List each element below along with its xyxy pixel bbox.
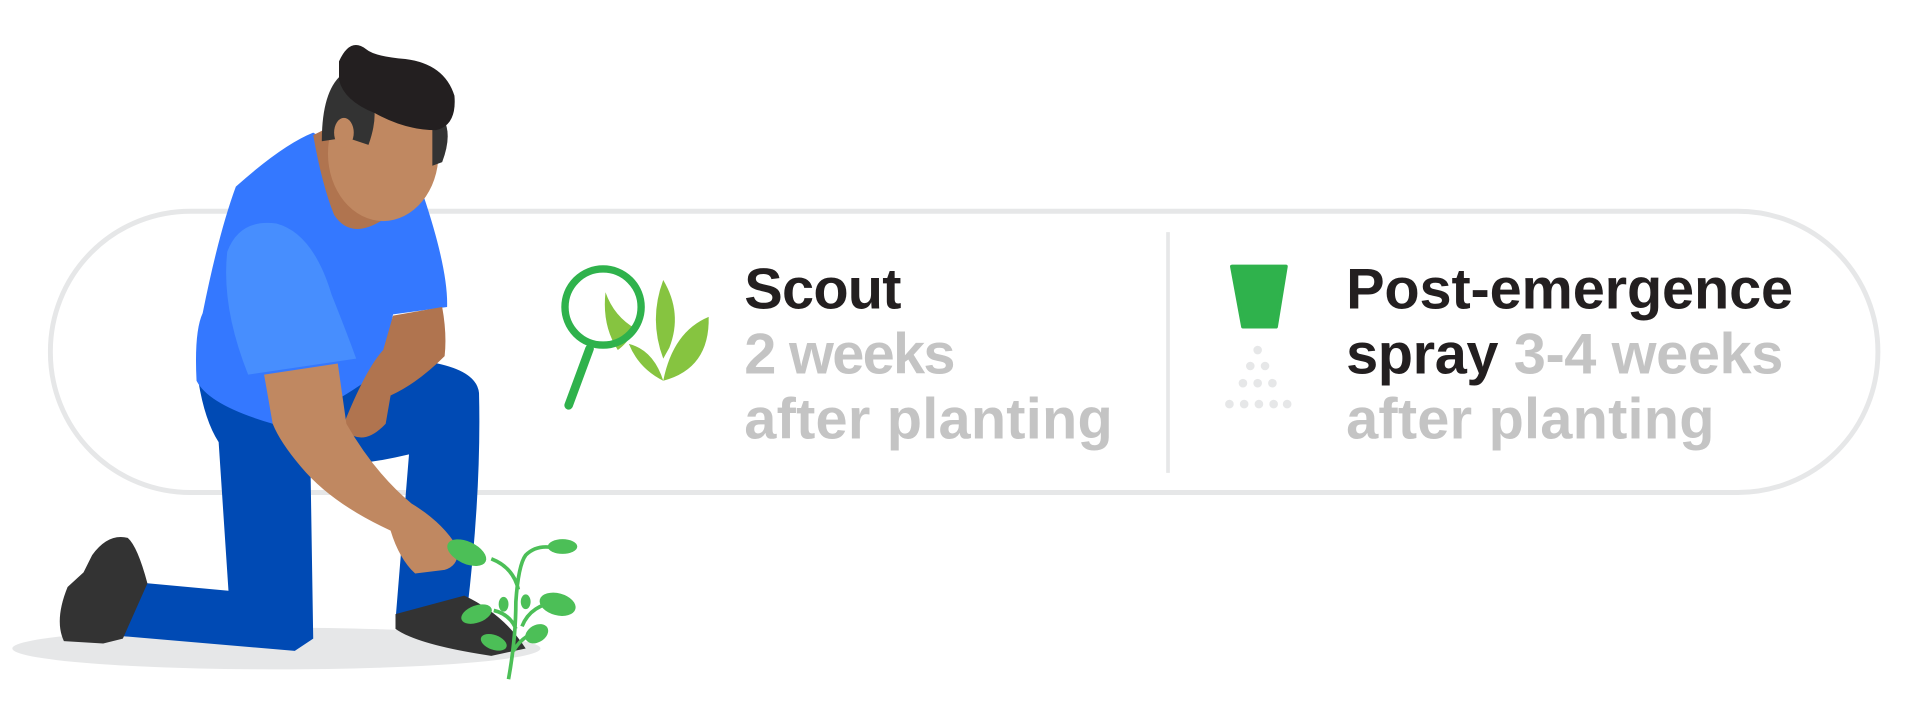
text: Scout: after planting [744, 387, 1113, 451]
text: Scout [744, 257, 1113, 451]
far arm [344, 307, 445, 438]
divider [1167, 232, 1170, 473]
head [313, 45, 455, 229]
front shoe [396, 596, 526, 656]
hair [322, 71, 375, 145]
torso [196, 133, 447, 424]
near arm [264, 364, 458, 574]
back shoe [60, 537, 147, 644]
text: Scout: 2 weeks [744, 322, 956, 386]
plant [443, 534, 578, 679]
panel: pill container [50, 211, 1878, 492]
ear [334, 118, 354, 147]
back leg [123, 368, 313, 651]
sleeve [226, 223, 356, 375]
shadow [12, 628, 540, 669]
icon: spray nozzle [1225, 267, 1291, 408]
text: Scout: Scout [744, 257, 902, 321]
figure: kneeling farmer [12, 45, 578, 679]
text: Post-emergence spray: after planting [1346, 387, 1715, 451]
front leg [283, 361, 479, 620]
text: Post-emergence spray: Post-emergence [1346, 257, 1793, 321]
icon: magnifier with seedling [565, 269, 709, 405]
text: Post-emergence spray [1346, 257, 1793, 451]
text: Post-emergence spray: spray 3-4 weeks [1346, 322, 1783, 386]
